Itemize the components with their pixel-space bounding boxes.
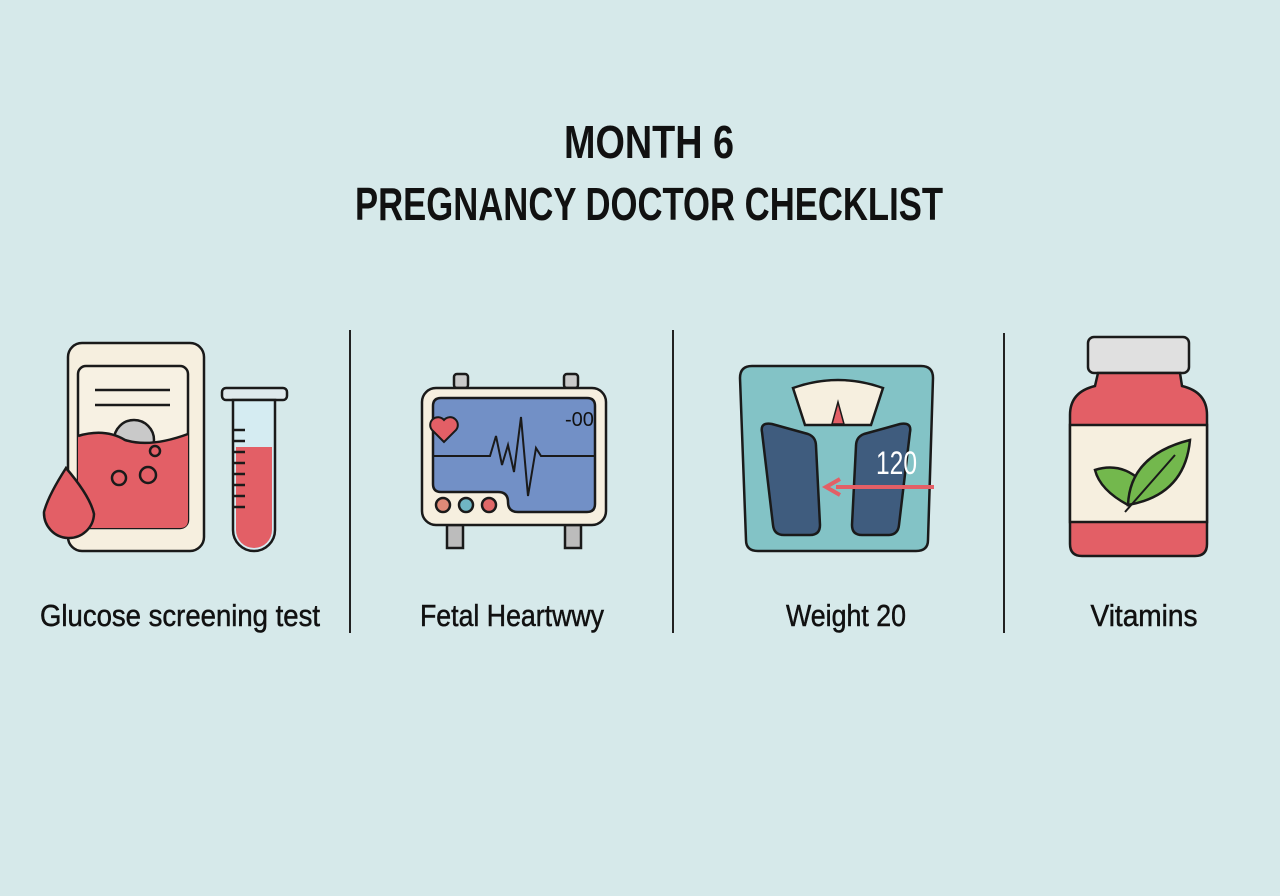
icon: fetal monitor: -00: [565, 409, 594, 431]
label: fetal: Fetal Heartwwy: [420, 598, 604, 633]
icon: fetal monitor: [422, 374, 606, 548]
icon: scale: [740, 366, 934, 551]
label: vitamins: Vitamins: [1090, 598, 1198, 633]
title: PREGNANCY DOCTOR CHECKLIST: [355, 178, 943, 230]
icon: glucose test card and tube: [44, 343, 287, 551]
title: [355, 116, 943, 230]
icon: vitamin bottle: [1070, 337, 1207, 556]
title: MONTH 6: [564, 116, 734, 168]
icon: scale: 120: [876, 445, 917, 481]
label: glucose: Glucose screening test: [40, 598, 320, 633]
label: weight: Weight 20: [786, 598, 906, 633]
